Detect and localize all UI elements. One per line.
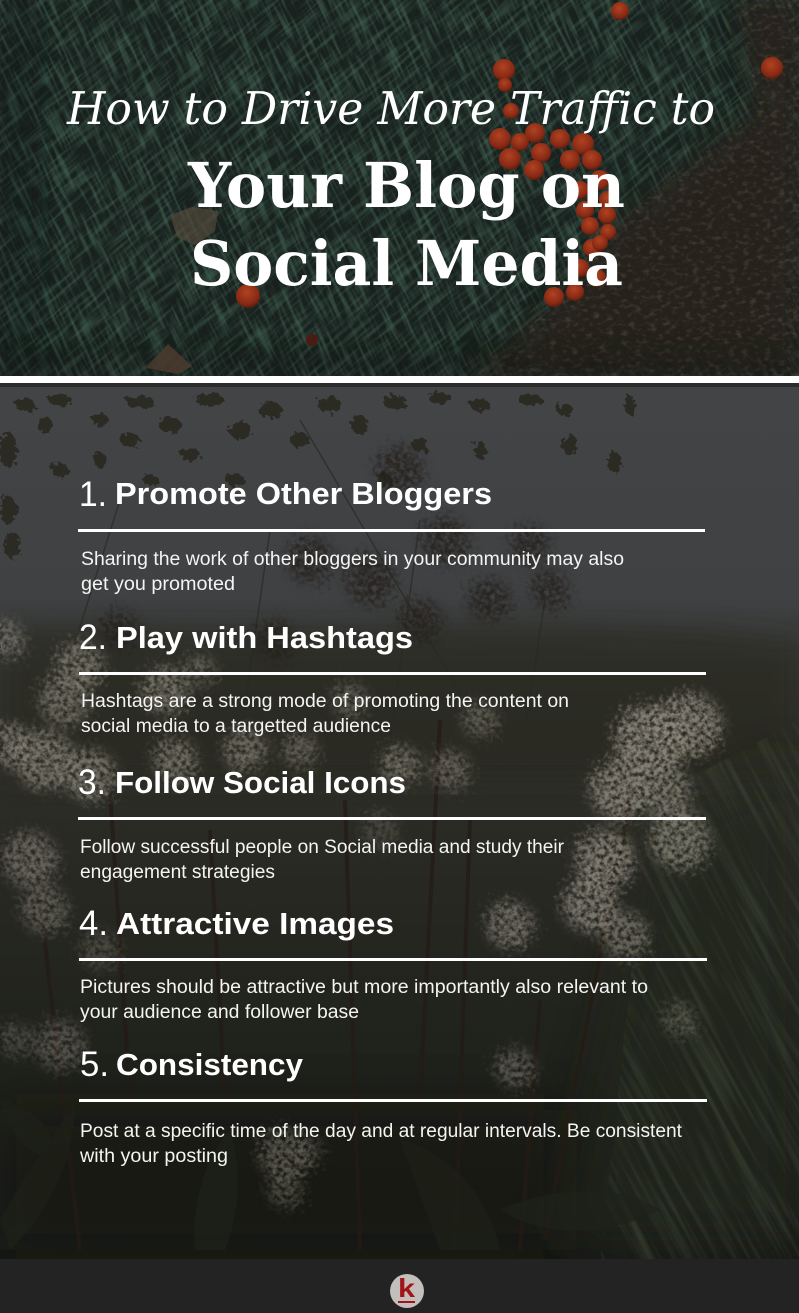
body 4: Pictures should be attractive but more importantly also relevant to — [80, 977, 648, 998]
section 3: follow social icons — [78, 763, 706, 883]
right side grass — [738, 794, 776, 1208]
body 3: engagement strategies — [80, 862, 275, 883]
section 2: play with hashtags — [79, 618, 706, 737]
body 1: Sharing the work of other bloggers in your community may also — [81, 549, 624, 570]
spiky dark seed heads — [100, 446, 570, 660]
section 4: attractive images — [79, 904, 707, 1023]
soil area — [470, 0, 799, 376]
flower stems — [40, 720, 630, 1250]
dark leaves at the top — [0, 392, 635, 559]
distant hill — [2, 622, 796, 754]
white divider band — [0, 376, 799, 383]
body 5: with your posting — [79, 1146, 228, 1167]
icon: red berries — [236, 2, 783, 346]
body 4: your audience and follower base — [80, 1002, 359, 1023]
heading 5: Consistency — [116, 1047, 304, 1082]
body 3: Follow successful people on Social media and study their — [80, 837, 565, 858]
body 5 — [79, 1121, 683, 1167]
number 3: 3. — [78, 763, 106, 802]
number 5: 5. — [80, 1045, 109, 1084]
heading 2: Play with Hashtags — [116, 620, 413, 655]
icon: k logo: k — [398, 1273, 416, 1303]
title line 1: How to Drive More Traffic to — [66, 82, 715, 135]
body 2: Hashtags are a strong mode of promoting the content on — [81, 691, 569, 712]
number 1: 1. — [79, 475, 107, 514]
body 2: social media to a targetted audience — [81, 716, 391, 737]
body 2 — [81, 691, 569, 737]
body 3 — [80, 837, 565, 883]
footer bar — [0, 1259, 799, 1313]
body 5: Post at a specific time of the day and at regular intervals. Be consistent — [80, 1121, 683, 1142]
heading 1: Promote Other Bloggers — [115, 476, 492, 511]
panel: body photo of wild flowers — [0, 387, 799, 1259]
number 4: 4. — [79, 904, 108, 943]
panel: header photo of grass and berries — [0, 0, 799, 376]
heading 3: Follow Social Icons — [115, 765, 406, 800]
title line 3: Social Media — [190, 227, 623, 300]
title — [66, 82, 715, 300]
body 4 — [80, 977, 648, 1023]
dry leaves — [170, 207, 218, 245]
body 1: get you promoted — [81, 574, 235, 595]
section 1: promote other bloggers — [78, 475, 705, 595]
number 2: 2. — [79, 618, 107, 657]
icon: k logo — [390, 1273, 424, 1308]
heading 4: Attractive Images — [116, 906, 394, 941]
section 5: consistency — [79, 1045, 707, 1167]
dark foliage — [606, 1194, 655, 1222]
title line 2: Your Blog on — [187, 149, 625, 222]
body 1 — [81, 549, 624, 595]
left edge shading — [0, 0, 40, 376]
pale flower puffs — [0, 620, 722, 1208]
